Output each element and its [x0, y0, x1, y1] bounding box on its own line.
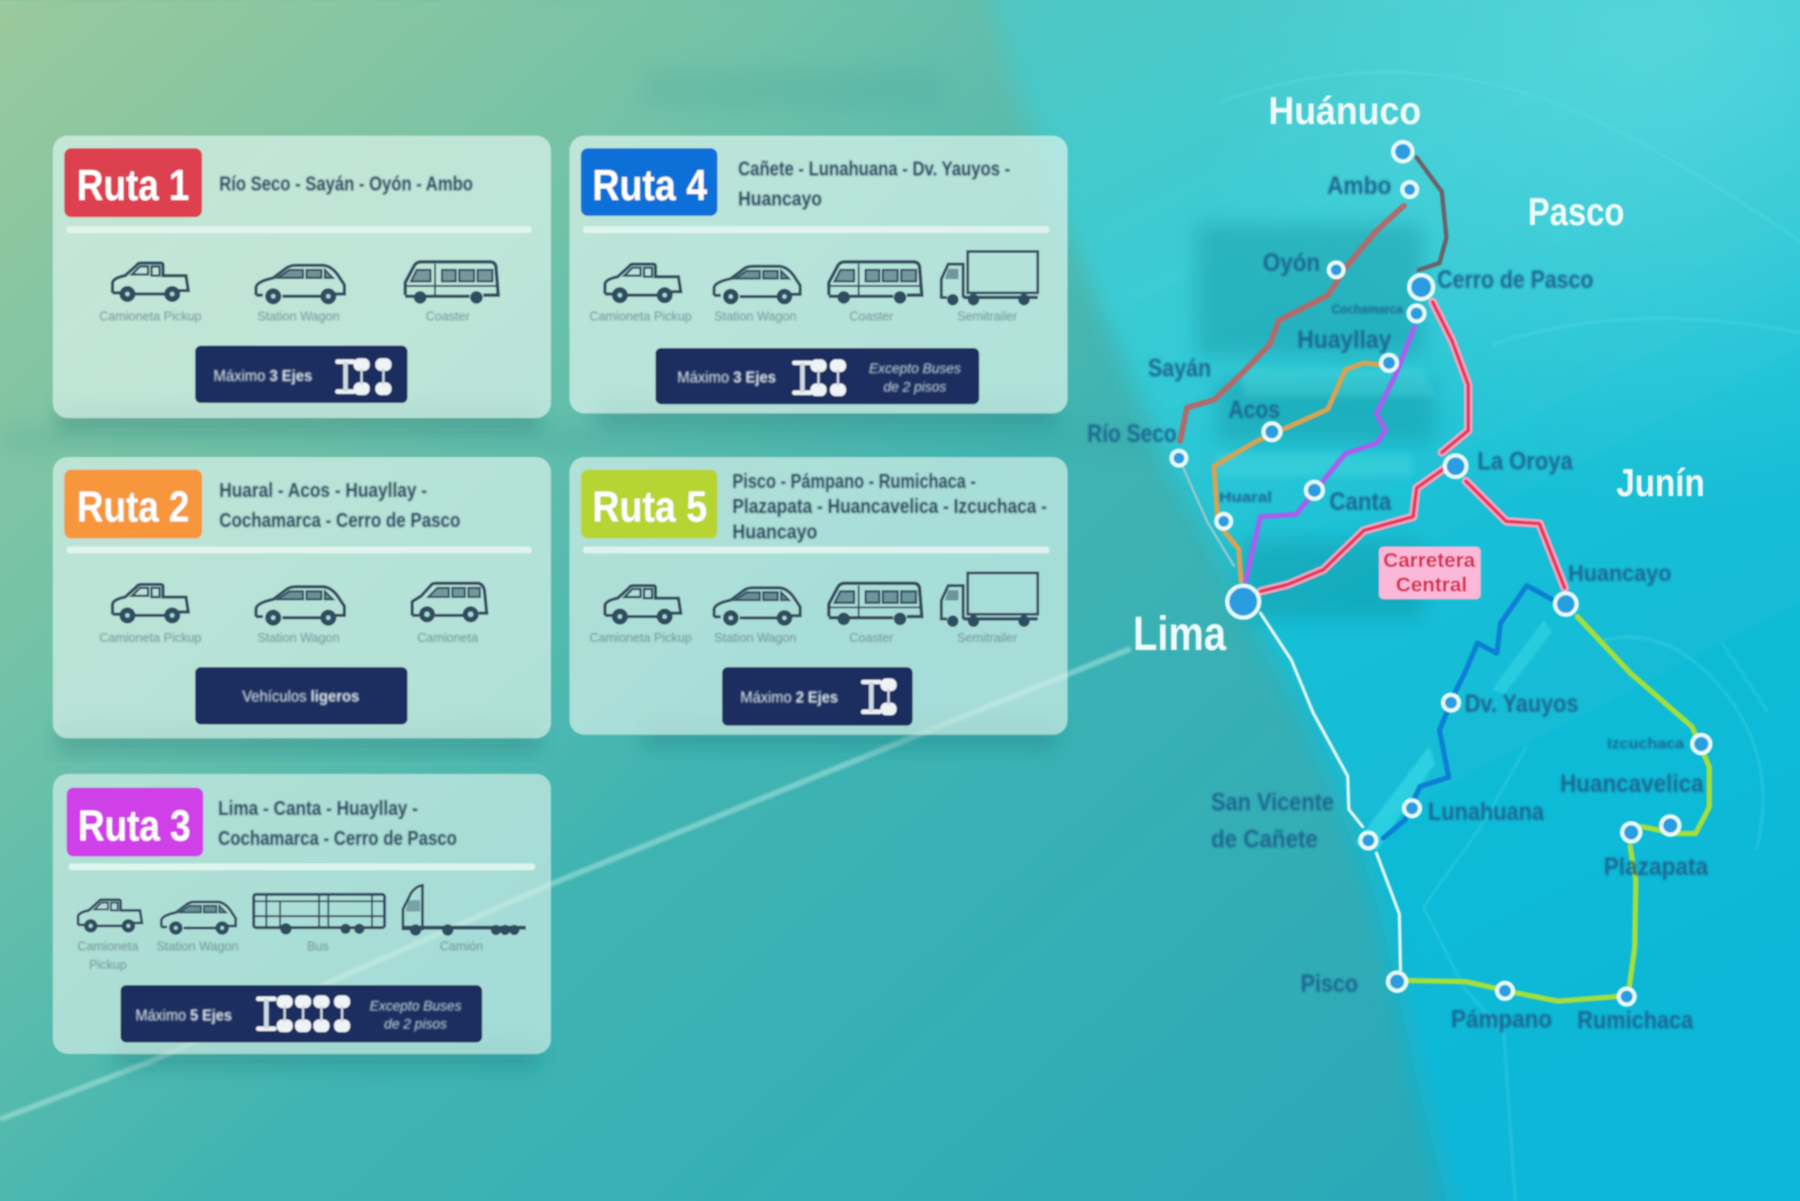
panel: Ruta 5 [569, 457, 1068, 749]
vehicle: coaster [405, 262, 498, 323]
route towns: Cochamarca - Cerro de Pasco [218, 827, 457, 850]
map: town labels: Sayán [1148, 355, 1211, 383]
vehicle: semitrailer: Semitrailer [957, 631, 1017, 645]
route: Río Seco to Lima (grey) [1182, 466, 1234, 566]
vehicle: station wagon: Station Wagon [156, 940, 239, 954]
panel: Ruta 3 [53, 774, 551, 1069]
map: region names [1133, 90, 1705, 661]
vehicle: coaster: Coaster [426, 309, 470, 323]
map: town labels: Acos [1228, 396, 1280, 424]
route: Carretera Central (red) [1260, 302, 1565, 591]
route towns: Río Seco - Sayán - Oyón - Ambo [219, 173, 473, 196]
vehicle: pickup: Camioneta Pickup [99, 631, 202, 645]
vehicle: station wagon: Station Wagon [257, 309, 340, 323]
map: town labels [1087, 172, 1709, 1035]
route towns: Pisco - Pámpano - Rumichaca - [732, 470, 976, 493]
limit badge: maximum 5 axles, except double-deck buses: Excepto Buses [370, 998, 462, 1013]
route towns [218, 797, 457, 850]
map: town labels: Cochamarca [1332, 303, 1404, 317]
limit badge: maximum 3 axles: Máximo 3 Ejes [214, 368, 312, 385]
limit badge: light vehicles: Vehículos ligeros [242, 689, 359, 706]
map: town labels: Río Seco [1087, 420, 1177, 448]
callout: Carretera Central: Carretera [1383, 549, 1476, 572]
panel: Ruta 2 [53, 457, 551, 753]
route: Lima to Pisco coast (white) [1260, 613, 1401, 970]
map: region names: Huánuco [1268, 90, 1421, 133]
vehicle: coaster: Coaster [849, 309, 893, 323]
map: routes [1180, 157, 1709, 1001]
heading: Ruta 4: Ruta 4 [592, 162, 708, 210]
vehicle: pickup [77, 900, 142, 972]
vehicle: semitrailer: Semitrailer [957, 309, 1017, 323]
route towns: Cochamarca - Cerro de Pasco [219, 509, 460, 532]
vehicle: station wagon: Station Wagon [714, 309, 796, 323]
vehicle: pickup: Camioneta Pickup [99, 309, 202, 323]
limit badge: maximum 3 axles, except double-deck buses: de 2 pisos [884, 380, 946, 395]
limit badge: maximum 2 axles [722, 667, 913, 726]
vehicle: coaster [829, 262, 922, 323]
vehicle: station wagon: Station Wagon [714, 631, 796, 645]
route towns [219, 479, 460, 532]
vehicle: SUV [412, 583, 487, 645]
vehicle: station wagon [714, 266, 800, 323]
map: town labels: Izcuchaca [1607, 736, 1685, 753]
heading: Ruta 2: Ruta 2 [77, 483, 189, 531]
map: town labels: Rumichaca [1577, 1007, 1694, 1035]
route 3: Lima to Cochamarca (purple) [1246, 327, 1414, 581]
heading: Ruta 1 [64, 148, 202, 217]
map: region names: Junín [1616, 462, 1705, 505]
vehicle: pickup: Camioneta Pickup [589, 631, 692, 645]
vehicle: pickup [589, 264, 692, 323]
vehicle: semitrailer [941, 573, 1038, 645]
map: town labels: Huancayo [1568, 560, 1671, 586]
vehicle: semitrailer [941, 252, 1038, 323]
map: town labels: Dv. Yauyos [1465, 690, 1578, 718]
heading: Ruta 3: Ruta 3 [78, 802, 191, 850]
map: town labels: Lunahuana [1428, 798, 1545, 826]
heading: Ruta 3 [67, 788, 203, 856]
limit badge: maximum 3 axles, except double-deck buses: Excepto Buses [869, 361, 961, 376]
vehicle: bus: Bus [307, 940, 329, 954]
vehicle: pickup: Pickup [89, 958, 127, 972]
heading: Ruta 1: Ruta 1 [77, 162, 189, 210]
route towns: Huaral - Acos - Huayllay - [219, 479, 427, 502]
vehicle: station wagon [714, 588, 800, 645]
map: town labels: Plazapata [1604, 853, 1709, 881]
map: town labels: Pisco [1301, 970, 1358, 998]
route towns: Huancayo [738, 188, 822, 211]
route towns: Plazapata - Huancavelica - Izcuchaca - [732, 495, 1047, 518]
route towns [732, 470, 1047, 544]
route towns: Cañete - Lunahuana - Dv. Yauyos - [738, 158, 1010, 181]
map: town labels: Huaral [1219, 489, 1272, 506]
heading: Ruta 4 [581, 148, 717, 216]
map: stops [1171, 142, 1710, 1005]
callout: Carretera Central [1379, 547, 1481, 599]
heading: Ruta 5 [581, 470, 717, 539]
map: town labels: Huancavelica [1560, 770, 1704, 798]
map: region names: Lima [1133, 607, 1227, 661]
map: town labels: Canta [1329, 488, 1392, 516]
route 5: Pisco to Huancayo (green) [1409, 617, 1709, 1001]
limit badge: maximum 3 axles [195, 346, 408, 403]
vehicle: pickup [99, 584, 202, 645]
vehicle: station wagon: Station Wagon [257, 631, 340, 645]
heading: Ruta 2 [64, 470, 202, 539]
vehicle: SUV: Camioneta [417, 631, 479, 645]
vehicle: pickup: Camioneta Pickup [589, 309, 692, 323]
limit badge: maximum 3 axles, except double-deck buses: Máximo 3 Ejes [677, 369, 776, 386]
limit badge: light vehicles [195, 667, 408, 724]
route towns: Lima - Canta - Huayllay - [218, 797, 418, 820]
limit badge: maximum 5 axles, except double-deck buses: de 2 pisos [384, 1017, 447, 1032]
map: town labels: Pámpano [1451, 1006, 1552, 1034]
map: town labels: Ambo [1327, 172, 1391, 200]
panel: Ruta 1 [53, 136, 551, 432]
route 2: Lima to Huayllay (orange) [1214, 363, 1381, 581]
vehicle: station wagon [156, 902, 239, 954]
limit badge: maximum 5 axles, except double-deck buses [121, 985, 482, 1042]
vehicle: coaster: Coaster [849, 631, 893, 645]
callout: Carretera Central: Central [1396, 573, 1467, 596]
limit badge: maximum 2 axles: Máximo 2 Ejes [740, 690, 838, 707]
vehicle: station wagon [256, 587, 344, 645]
route: Huánuco to Cerro de Pasco (dark brown) [1417, 157, 1446, 270]
map: town labels: de Cañete [1211, 825, 1318, 853]
route towns: Huancayo [732, 521, 817, 544]
vehicle: pickup [99, 263, 202, 323]
vehicle: pickup: Camioneta [77, 940, 139, 954]
route towns [738, 158, 1010, 211]
map: town labels: Cerro de Pasco [1437, 266, 1593, 294]
vehicle: bus [254, 894, 385, 954]
vehicle: truck [403, 885, 526, 954]
vehicle: pickup [589, 586, 692, 645]
map: region names: Pasco [1528, 191, 1624, 234]
heading: Ruta 5: Ruta 5 [592, 483, 707, 531]
map: town labels: Oyón [1263, 249, 1320, 277]
map: town labels: Huayllay [1297, 326, 1391, 354]
vehicle: station wagon [256, 265, 344, 323]
vehicle: coaster [829, 583, 922, 645]
route 1: Río Seco to Ambo (brown) [1180, 206, 1404, 441]
map: town labels: La Oroya [1477, 448, 1574, 476]
route 4: Cañete to Huancayo (blue) [1383, 586, 1552, 838]
vehicle: truck: Camión [440, 940, 483, 954]
limit badge: maximum 3 axles, except double-deck buses [655, 348, 979, 404]
map: town labels: San Vicente [1211, 789, 1334, 817]
limit badge: maximum 5 axles, except double-deck buses: Máximo 5 Ejes [135, 1008, 232, 1025]
panel: Ruta 4 [569, 136, 1068, 427]
